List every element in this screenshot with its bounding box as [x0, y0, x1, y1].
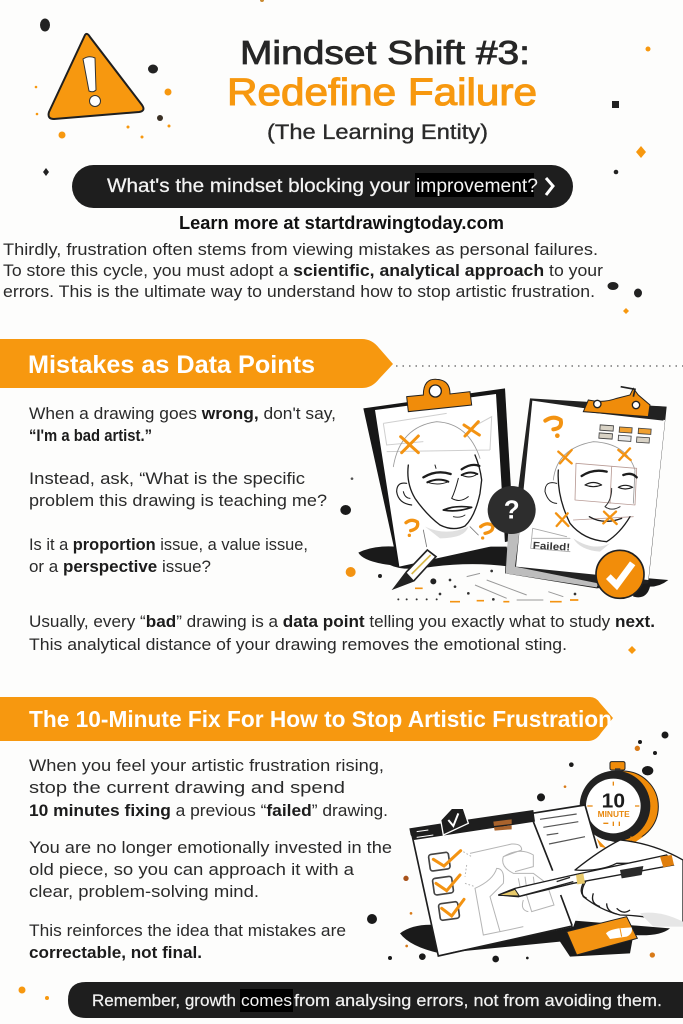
ink shadow — [400, 920, 670, 957]
title: Mindset Shift #3: — [240, 34, 530, 71]
text block: 10 minute fix: This reinforces the idea that mistakes are — [29, 921, 346, 940]
orange marks left — [401, 422, 493, 533]
left face — [425, 527, 468, 538]
sketch — [463, 844, 554, 935]
text block: mistakes: Is it a proportion issue, a value issue, — [29, 535, 308, 554]
text block: 10 minute fix: clear, problem-solving mind. — [29, 882, 259, 901]
check badge — [596, 550, 644, 598]
closing pill: comes — [241, 991, 292, 1010]
text block: mistakes: “I'm a bad artist.” — [29, 426, 152, 445]
closing pill: Remember, growth — [92, 991, 236, 1010]
ink shadow — [358, 546, 510, 569]
text block: 10 minute fix: old piece, so you can approach it with a — [29, 860, 355, 879]
intro paragraph: errors. This is the ultimate way to understand how to stop artistic frustration. — [3, 282, 595, 301]
question pill: improvement? — [416, 176, 538, 197]
closing pill — [68, 982, 683, 1018]
pencil — [394, 550, 436, 588]
text block: 10 minute fix: stop the current drawing and spend — [29, 778, 345, 797]
title: (The Learning Entity) — [267, 121, 488, 144]
clip — [407, 379, 472, 412]
text block: 10 minute fix: correctable, not final. — [29, 943, 202, 962]
decorative dots: mid — [628, 646, 636, 654]
clipboard left — [363, 388, 514, 567]
text block: 10 minute fix — [29, 756, 392, 962]
scatter — [419, 751, 657, 962]
question badge — [488, 486, 536, 534]
banner: the 10-minute fix: The 10-Minute Fix For How to Stop Artistic Frustration — [29, 706, 612, 732]
illustration: fixing a drawing with timer: MINUTE — [598, 810, 630, 819]
decorative dots: lower — [18, 732, 668, 1000]
title — [227, 34, 537, 144]
timer — [610, 762, 625, 770]
orange marks right — [545, 418, 631, 526]
checkboxes — [428, 851, 464, 921]
text block: 10 minute fix: When you feel your artistic frustration rising, — [29, 756, 384, 775]
text block: 10 minute fix: You are no longer emotionally invested in the — [29, 838, 392, 857]
decorative dots: header — [35, 0, 650, 176]
text block: mistakes: problem this drawing is teaching me? — [29, 491, 327, 510]
banner: mistakes as data points — [0, 339, 393, 388]
pen — [498, 855, 673, 897]
banner: the 10-minute fix — [0, 697, 613, 741]
title: Redefine Failure — [227, 72, 537, 114]
text block: mistakes: When a drawing goes wrong, don't say, — [29, 404, 336, 423]
failed label: Failed! — [533, 541, 570, 554]
timer label: 10 — [602, 791, 625, 813]
closing pill: from analysing errors, not from avoiding them. — [294, 991, 662, 1010]
learn more link: Learn more at startdrawingtoday.com — [179, 213, 504, 233]
question pill: What's the mindset blocking your — [107, 176, 411, 197]
illustration: two clipboards with failed face drawings: ? — [504, 494, 520, 524]
right face — [573, 538, 610, 552]
swatches — [599, 425, 651, 443]
clip — [441, 808, 468, 835]
text block: mistakes: Usually, every “bad” drawing is a data point telling you exactly what to study next. — [29, 612, 655, 631]
text block: mistakes: or a perspective issue? — [29, 557, 211, 576]
tablet + clipboard right — [505, 398, 667, 588]
hand — [575, 840, 683, 923]
text block: mistakes — [29, 404, 655, 654]
question pill — [72, 165, 573, 208]
text block: 10 minute fix: 10 minutes fixing a previous “failed” drawing. — [29, 801, 388, 820]
intro paragraph — [3, 240, 603, 301]
illustration: fixing a drawing with timer — [400, 746, 683, 962]
intro paragraph: Thirdly, frustration often stems from viewing mistakes as personal failures. — [3, 240, 598, 259]
text block: mistakes: This analytical distance of your drawing removes the emotional sting. — [29, 635, 567, 654]
icon: warning triangle — [49, 34, 143, 119]
decorative dots: intro — [608, 282, 642, 314]
intro paragraph: To store this cycle, you must adopt a scientific, analytical approach to your — [3, 261, 603, 280]
banner: mistakes as data points: Mistakes as Data Points — [28, 351, 315, 379]
illustration: two clipboards with failed face drawings — [340, 379, 668, 602]
orange tab — [567, 917, 637, 955]
board — [413, 805, 598, 955]
text block: mistakes: Instead, ask, “What is the specific — [29, 469, 306, 488]
scatter — [346, 567, 356, 577]
